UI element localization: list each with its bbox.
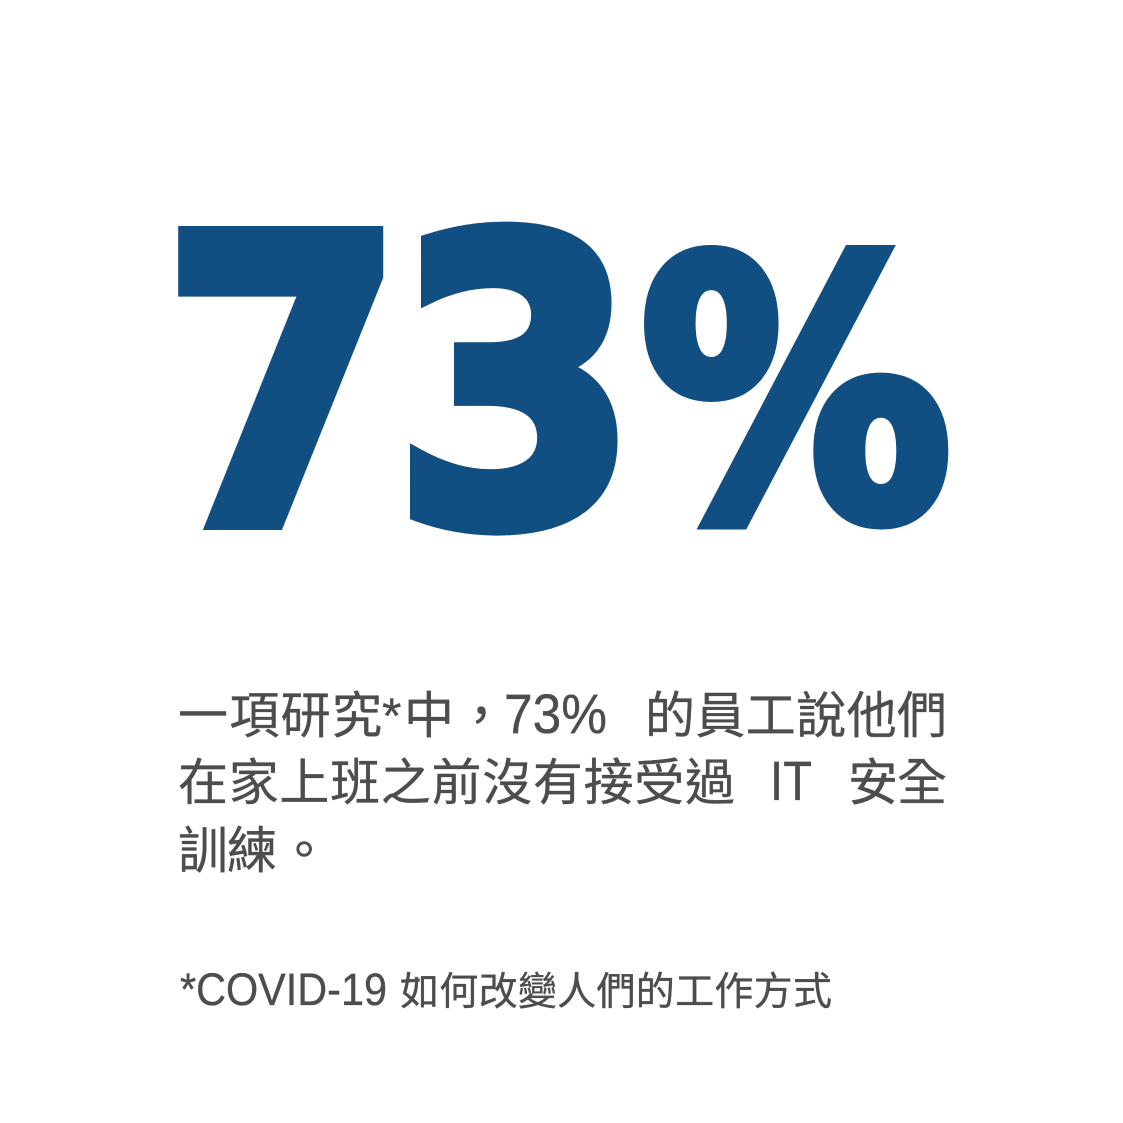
- body text: 一項研究: [178, 688, 382, 744]
- body text: IT: [770, 749, 812, 812]
- footnote: *COVID-19: [180, 964, 387, 1015]
- big number: 73%: 7: [162, 156, 404, 615]
- body text: 訓練: [178, 823, 277, 879]
- body text: 的員工說他們: [645, 688, 947, 744]
- body text: [178, 682, 947, 879]
- big number: 73%: %: [641, 187, 951, 601]
- body text: *: [382, 688, 401, 744]
- body text: 73%: [504, 682, 607, 745]
- footnote: 如何改變人們的工作方式: [400, 971, 832, 1014]
- big number: 73%: [162, 156, 951, 616]
- body text: ，: [456, 688, 506, 744]
- body text: 中: [404, 688, 454, 744]
- big number: 73%: 3: [394, 157, 638, 616]
- body text: 在家上班之前沒有接受過: [178, 755, 735, 811]
- body text: 。: [279, 823, 329, 879]
- body text: 安全: [848, 755, 947, 811]
- footnote: [180, 964, 832, 1015]
